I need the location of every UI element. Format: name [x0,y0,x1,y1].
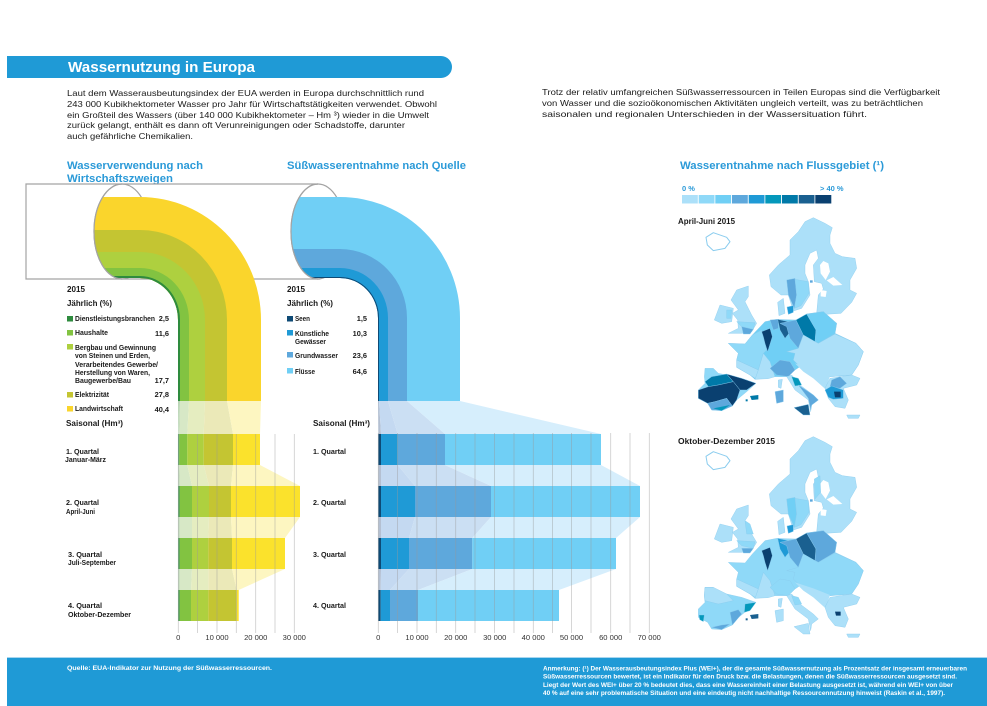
pale funnels: sources [378,401,640,590]
legend: sectors: 40,4 [155,405,170,414]
heading: use by sector: Wasserverwendung nach [67,160,203,172]
legend: sectors: Verarbeitendes Gewerbe/ [75,360,158,369]
legend: sources: Flüsse [295,367,315,376]
heading: abstraction by source: Süßwasserentnahme nach Quelle [287,160,466,172]
intro text right: saisonalen und regionalen Unterschieden in der Wassersituation führt. [542,109,867,119]
legend: sectors: 2,5 [159,314,169,323]
legend: sectors: 11,6 [155,329,169,338]
seasonal labels: sources: Saisonal (Hm³) [313,419,370,428]
intro text left: auch gefährliche Chemikalien. [67,131,193,141]
legend: sectors: von Steinen und Erden, [75,351,150,360]
heading: use by sector [67,160,203,185]
legend: sectors: Herstellung von Waren, [75,368,150,377]
pipe mouth outlines [94,184,318,279]
map: April-Juni 2015 [698,218,863,418]
bar chart: seasonal water use by sector: 0 [176,633,180,642]
bar chart: seasonal abstraction by source: 20 000 [444,633,467,642]
intro text left: ein Großteil des Wassers (über 140 000 Kubikhektometer – Hm ³) wieder in die Umwelt [67,110,430,120]
seasonal labels: sectors: Januar-März [65,455,106,464]
seasonal labels: sectors: Juli-September [68,558,116,567]
legend: sources: 64,6 [353,367,367,376]
bar chart: seasonal abstraction by source: 30 000 [483,633,506,642]
map label: April-Juni: April-Juni 2015 [678,217,736,226]
map: Oktober-Dezember 2015 [698,437,863,637]
pipe: water use by sector [90,197,261,401]
seasonal labels: sectors: 1. Quartal [66,447,99,456]
seasonal labels: sectors: April-Juni [66,507,95,516]
bar chart: seasonal abstraction by source: 60 000 [599,633,622,642]
bar chart: seasonal abstraction by source: 10 000 [405,633,429,642]
intro text right [542,87,941,119]
footnote: Liegt der Wert des WEI+ über 20 % bedeutet dies, dass eine Wassereinheit einer Belastung ausgesetzt ist, während ein WEI+ von über [543,682,953,689]
legend: sources [287,285,367,376]
bar chart: seasonal water use by sector: 30 000 [283,633,306,642]
pale funnels: sectors [178,401,300,590]
legend: sources: Grundwasser [295,351,338,360]
footnote: Süßwasserressourcen bewertet, ist ein Indikator für den Druck bzw. die Belastungen, denen die Süßwasserressourcen ausgesetzt sind. [543,674,957,680]
bar chart: seasonal abstraction by source: 50 000 [560,633,583,642]
intro text left [67,88,437,141]
legend: sectors: Bergbau und Gewinnung [75,343,156,352]
seasonal labels: sources [313,419,370,610]
legend: sectors: 17,7 [155,376,169,385]
legend: sectors [67,285,170,414]
seasonal labels: sectors: 3. Quartal [68,550,102,559]
bar chart: seasonal water use by sector: 20 000 [244,633,267,642]
legend: sectors: Dienstleistungsbranchen [75,314,155,323]
intro text left: 243 000 Kubikhektometer Wasser pro Jahr für Wirtschaftstätigkeiten verwendet. Obwohl [67,99,437,109]
footnote: Anmerkung: (¹) Der Wasserausbeutungsindex Plus (WEI+), der die gesamte Süßwassernutzung als Prozentsatz der insgesamt erneuerbaren [543,666,967,672]
bar chart: seasonal water use by sector [176,434,306,642]
map legend: 0 % [682,184,695,193]
pipe outline [26,184,345,279]
intro text left: Laut dem Wasserausbeutungsindex der EUA werden in Europa durchschnittlich rund [67,88,424,98]
legend: sources: Gewässer [295,337,326,346]
seasonal labels: sources: 4. Quartal [313,601,346,610]
seasonal labels: sources: 1. Quartal [313,447,346,456]
seasonal labels: sectors: Saisonal (Hm³) [66,419,123,428]
bar chart: seasonal abstraction by source: 70 000 [638,633,661,642]
intro text right: Trotz der relativ umfangreichen Süßwasserressourcen in Teilen Europas sind die Verfügbarkeit [542,87,941,97]
legend: sources: 1,5 [357,314,367,323]
pipe: abstraction by source [285,197,460,401]
intro text right: von Wasser und die sozioökonomischen Aktivitäten ungleich verteilt, was zu beträchtlichen [542,98,923,108]
bar chart: seasonal abstraction by source: 40 000 [522,633,545,642]
title banner: Wassernutzung in Europa [68,59,256,76]
legend: sectors: Elektrizität [75,390,109,399]
title banner [7,56,452,78]
legend: sources: 10,3 [353,329,367,338]
seasonal labels: sources: 3. Quartal [313,550,346,559]
legend: sources: Jährlich (%) [287,299,333,308]
legend: sectors: 2015 [67,285,86,294]
legend: sectors: 27,8 [155,390,169,399]
bar chart: seasonal water use by sector: 10 000 [205,633,229,642]
legend: sectors: Haushalte [75,328,108,337]
seasonal labels: sources: 2. Quartal [313,498,346,507]
footer band [7,657,987,706]
legend: sources: 2015 [287,285,306,294]
bar chart: seasonal abstraction by source [376,433,661,642]
heading: abstraction by river basin: Wasserentnahme nach Flussgebiet (¹) [680,160,884,172]
seasonal labels: sectors: Oktober-Dezember [68,610,131,619]
legend: sources: Seen [295,314,310,323]
legend: sectors: Baugewerbe/Bau [75,376,131,385]
footnote [543,666,967,697]
legend: sources: 23,6 [353,351,367,360]
map legend [682,184,844,204]
seasonal labels: sectors: 4. Quartal [68,601,102,610]
bar chart: seasonal abstraction by source: 0 [376,633,380,642]
legend: sectors: Jährlich (%) [67,299,112,308]
legend: sectors: Landwirtschaft [75,404,123,413]
heading: use by sector: Wirtschaftszweigen [67,173,173,185]
source note: Quelle: EUA-Indikator zur Nutzung der Süßwasserressourcen. [67,665,272,672]
footnote: 40 % auf eine sehr problematische Situation und eine eindeutig nicht nachhaltige Ressourcennutzung hinweist (Raskin et al., 1997). [543,690,945,697]
intro text left: zurück gelangt, enthält es dann oft Verunreinigungen oder Schadstoffe, darunter [67,120,405,130]
seasonal labels: sectors [65,419,131,619]
map label: Oktober-Dezember: Oktober-Dezember 2015 [678,437,776,446]
seasonal labels: sectors: 2. Quartal [66,498,99,507]
legend: sources: Künstliche [295,329,329,338]
map legend: > 40 % [820,184,844,193]
